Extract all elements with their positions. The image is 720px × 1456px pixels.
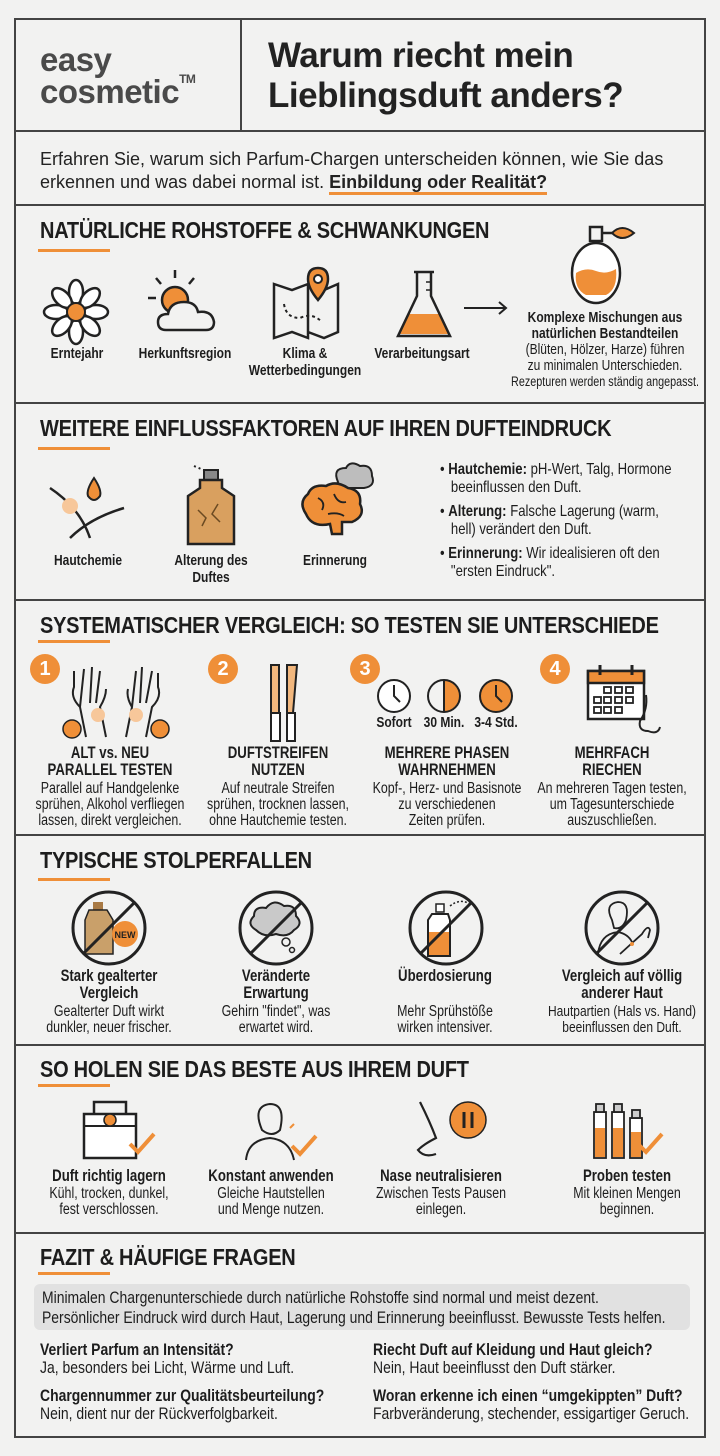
tip 2: Konstant anwenden [208, 1167, 334, 1185]
section 2 heading: WEITERE EINFLUSSFAKTOREN AUF IHREN DUFTEINDRUCK [40, 415, 611, 441]
label: Klima: Klima & [283, 345, 327, 362]
section 6 heading: FAZIT & HÄUFIGE FRAGEN [40, 1244, 295, 1270]
step 3: 30 Min. [424, 714, 464, 731]
tip 3: einlegen. [416, 1201, 466, 1218]
section 5 heading: SO HOLEN SIE DAS BESTE AUS IHREM DUFT [40, 1056, 469, 1082]
step 2: Auf neutrale Streifen [221, 780, 335, 797]
pitfall 4: Vergleich auf völlig [562, 967, 682, 985]
text: complex mixtures: zu minimalen Unterschieden. [528, 357, 682, 374]
pitfall 4: beeinflussen den Duft. [562, 1019, 682, 1036]
pitfall 2: Veränderte [242, 967, 310, 985]
logo: easy [40, 41, 111, 78]
tip 1: Duft richtig lagern [52, 1167, 166, 1185]
pitfall 2: Erwartung [243, 984, 309, 1002]
step 3: 3 [359, 658, 371, 680]
faq 2: Nein, Haut beeinflusst den Duft stärker. [373, 1358, 616, 1377]
tip 4 [573, 1103, 681, 1218]
pitfall 2: erwartet wird. [239, 1019, 313, 1036]
bullet list: "ersten Eindruck". [451, 563, 555, 580]
panel: best practices [49, 1100, 681, 1218]
step 2: ohne Hautchemie testen. [209, 812, 347, 829]
icon: flask [396, 270, 452, 338]
bullet list [440, 461, 672, 580]
label: Alterung [174, 552, 248, 586]
pitfall 1 [46, 890, 172, 1036]
label: Alterung: Alterung des [174, 552, 248, 569]
step 1: 1 [39, 658, 51, 680]
text: complex mixtures: Komplexe Mischungen aus [528, 309, 682, 326]
step 2: DUFTSTREIFEN [228, 744, 328, 762]
pitfall 2: Gehirn "findet", was [222, 1003, 330, 1020]
bullet list: beeinflussen den Duft. [451, 479, 582, 496]
panel: test steps [30, 654, 687, 829]
icon: sun cloud [148, 270, 216, 332]
faq 3: Nein, dient nur der Rückverfolgbarkeit. [40, 1404, 278, 1423]
arrow [464, 301, 508, 315]
pitfall 1: Gealterter Duft wirkt [54, 1003, 164, 1020]
tip 1 [49, 1100, 169, 1218]
label: Hautchemie: Hautchemie [54, 552, 122, 569]
pitfall 4: anderer Haut [581, 984, 663, 1002]
step 3: 3-4 Std. [474, 714, 518, 731]
FAQ grid [40, 1340, 689, 1423]
logo [40, 41, 196, 110]
step 4: RIECHEN [582, 761, 642, 779]
faq 1: Ja, besonders bei Licht, Wärme und Luft. [40, 1358, 294, 1377]
faq 4: Farbveränderung, stechender, essigartiger Geruch. [373, 1404, 689, 1423]
step 3 [350, 654, 521, 829]
faq 1 [40, 1340, 294, 1377]
section 3 heading: SYSTEMATISCHER VERGLEICH: SO TESTEN SIE UNTERSCHIEDE [40, 612, 659, 638]
step 1: PARALLEL TESTEN [48, 761, 172, 779]
label: Erinnerung: Erinnerung [303, 552, 367, 569]
bullet list: hell) verändert den Duft. [451, 521, 592, 538]
pitfall 2 [222, 890, 330, 1036]
step 2: NUTZEN [251, 761, 305, 779]
tip 4: Mit kleinen Mengen [573, 1185, 681, 1202]
pitfall 4 [548, 890, 696, 1036]
logo: cosmeticTM [40, 72, 195, 110]
tip 4: Proben testen [583, 1167, 671, 1185]
faq 3: Chargennummer zur Qualitätsbeurteilung? [40, 1386, 324, 1405]
title [268, 36, 623, 115]
faq 2 [373, 1340, 653, 1377]
step 1: ALT vs. NEU [71, 744, 149, 762]
title: Lieblingsduft anders? [268, 76, 623, 115]
step 4: 4 [549, 658, 561, 680]
step 4: auszuschließen. [567, 812, 657, 829]
icon: skin [49, 476, 124, 539]
bullet list: • Alterung: Falsche Lagerung (warm, [440, 503, 659, 520]
pitfall 3: Überdosierung [398, 967, 492, 985]
step 4 [537, 654, 687, 829]
pitfall 1: dunkler, neuer frischer. [46, 1019, 172, 1036]
section 4 heading: TYPISCHE STOLPERFALLEN [40, 847, 312, 873]
faq 4 [373, 1386, 689, 1423]
text: complex mixtures: (Blüten, Hölzer, Harze) führen [526, 341, 684, 358]
intro text: Erfahren Sie, warum sich Parfum-Chargen unterscheiden können, wie Sie das erkennen und was dabei normal ist. Einbildung oder Realität? [40, 149, 663, 192]
text: complex mixtures [511, 309, 699, 389]
pitfall 1: Vergleich [80, 984, 138, 1002]
label: Erntejahr: Erntejahr [51, 345, 103, 362]
icon: map pin [272, 266, 340, 340]
icon: flower [42, 278, 110, 346]
label: Klima: Wetterbedingungen [249, 362, 361, 379]
step 1 [30, 654, 184, 829]
tip 3 [376, 1101, 506, 1218]
tip 3: Zwischen Tests Pausen [376, 1185, 506, 1202]
panel: other factors [49, 461, 672, 586]
step 1: lassen, direkt vergleichen. [38, 812, 182, 829]
step 1: sprühen, Alkohol verfliegen [36, 796, 184, 813]
label: Klima [248, 345, 361, 379]
tip 1: fest verschlossen. [59, 1201, 159, 1218]
tip 4: beginnen. [600, 1201, 654, 1218]
pitfall 3 [397, 890, 493, 1036]
pitfall 1: NEW [114, 930, 136, 940]
tip 1: Kühl, trocken, dunkel, [49, 1185, 169, 1202]
bullet list: • Hautchemie: pH-Wert, Talg, Hormone [440, 461, 672, 478]
faq 4: Woran erkenne ich einen “umgekippten” Duft? [373, 1386, 683, 1405]
label: Verarbeitungsart: Verarbeitungsart [374, 345, 470, 362]
tip 2: und Menge nutzen. [218, 1201, 324, 1218]
step 3: MEHRERE PHASEN [385, 744, 509, 762]
bullet list: • Erinnerung: Wir idealisieren oft den [440, 545, 660, 562]
faq 3 [40, 1386, 324, 1423]
section 1 heading: NATÜRLICHE ROHSTOFFE & SCHWANKUNGEN [40, 217, 489, 243]
step 4: MEHRFACH [575, 744, 649, 762]
step 1: Parallel auf Handgelenke [41, 780, 179, 797]
label: Alterung: Duftes [192, 569, 230, 586]
step 3: Kopf-, Herz- und Basisnote [373, 780, 521, 797]
pitfall 4: Hautpartien (Hals vs. Hand) [548, 1003, 696, 1020]
pitfall 3: Mehr Sprühstöße [397, 1003, 493, 1020]
step 2 [207, 654, 349, 829]
step 3: Zeiten prüfen. [409, 812, 485, 829]
summary box: Minimalen Chargenunterschiede durch natürliche Rohstoffe sind normal und meist dezent. [42, 1288, 599, 1307]
tip 3: Nase neutralisieren [380, 1167, 502, 1185]
icon: aged bottle [186, 465, 236, 546]
panel: pitfalls [46, 890, 696, 1036]
faq 2: Riecht Duft auf Kleidung und Haut gleich? [373, 1340, 653, 1359]
text: complex mixtures: natürlichen Bestandteilen [532, 325, 678, 342]
pitfall 3: wirken intensiver. [397, 1019, 493, 1036]
pitfall 1: Stark gealterter [61, 967, 157, 985]
summary box: Persönlicher Eindruck wird durch Haut, Lagerung und Erinnerung beeinflusst. Bewusste Tests helfen. [42, 1308, 666, 1326]
label: Herkunftsregion: Herkunftsregion [139, 345, 231, 362]
icon: brain [301, 462, 374, 536]
step 3: zu verschiedenen [398, 796, 496, 813]
step 4: um Tagesunterschiede [550, 796, 674, 813]
step 2: sprühen, trocknen lassen, [207, 796, 349, 813]
tip 2 [208, 1103, 334, 1218]
step 3: Sofort [376, 714, 412, 731]
step 2: 2 [217, 658, 229, 680]
icon: perfume bottle [570, 226, 636, 304]
faq 1: Verliert Parfum an Intensität? [40, 1340, 234, 1359]
step 4: An mehreren Tagen testen, [537, 780, 687, 797]
text: complex mixtures: Rezepturen werden ständig angepasst. [511, 374, 699, 389]
summary box [34, 1284, 690, 1330]
tip 2: Gleiche Hautstellen [217, 1185, 325, 1202]
title: Warum riecht mein [268, 36, 573, 75]
panel: raw materials [42, 226, 699, 389]
step 3: WAHRNEHMEN [398, 761, 496, 779]
